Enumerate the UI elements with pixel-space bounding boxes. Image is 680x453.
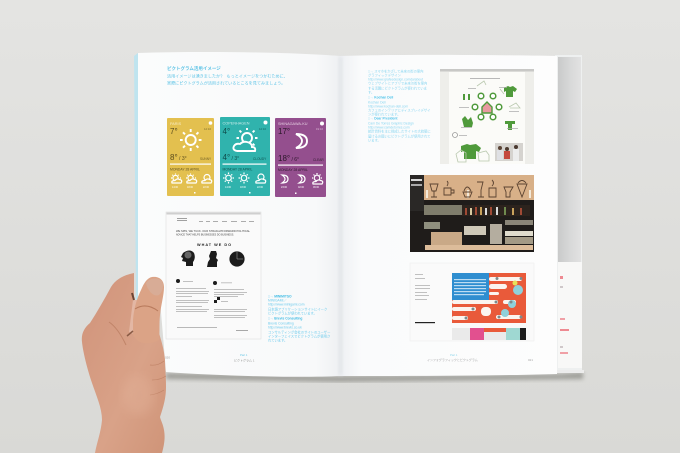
captions: right page: カフェのインテリアにディスプレイデザイ: [368, 108, 430, 112]
captions: right page: います。: [368, 138, 381, 142]
weather card: Copenhagen: 22:00: [257, 186, 264, 189]
weather card: Copenhagen: 4° / 3°: [222, 153, 239, 162]
screenshot: Brevis Consulting website: WE SPIN, WE TUCK. OUR STRAIGHTFORWARD POLITICAL: [176, 229, 250, 233]
page footer: right: [427, 353, 533, 362]
captions: left page: コンサルティング会社のサイトのユーザー: [268, 330, 330, 334]
weather card: Copenhagen: CLOUDY: [253, 157, 267, 161]
weather card: Paris: 7°: [170, 127, 178, 136]
page footer: left: Part 1: [240, 353, 248, 357]
weather card: Paris: PARIS: [170, 122, 182, 126]
weather card: Shinagawa-ku: 02:00: [298, 186, 305, 189]
hand holding the book: [82, 273, 166, 453]
photo: cafe interior with pictogram signage: [410, 175, 534, 252]
captions: left page: Brevis Consulting: [268, 322, 294, 326]
pictogram signage: [430, 180, 527, 197]
heading and intro text: ピクトグラム活用イメージ: [167, 65, 221, 72]
page footer: left: [165, 353, 255, 362]
book shadow: [166, 372, 583, 382]
what we do heading: WHAT WE DO: [197, 243, 232, 247]
page footer: left: 020: [165, 356, 170, 360]
captions: left page: http://www.minigami.com: [268, 302, 305, 306]
weather card: Copenhagen: COPENHAGEN: [222, 122, 250, 126]
captions: left page: インターフェイスでピクトグラムが使用さ: [268, 334, 330, 338]
captions: right page: □→ Dear President: [368, 116, 398, 120]
weather card: Paris: 12:10: [204, 127, 211, 131]
page footer: right: Part 1: [450, 353, 458, 357]
captions: right page: [368, 68, 431, 142]
weather card: Copenhagen: MONDAY 28 APRIL: [222, 168, 252, 172]
forecast icons: [171, 174, 212, 183]
captions: left page: れています。: [268, 338, 287, 342]
weather card: Shinagawa-ku: 23:00: [281, 186, 288, 189]
weather card: Shinagawa-ku: 06:00: [313, 186, 320, 189]
weather card: Copenhagen: 12:10: [259, 127, 266, 131]
weather card: Paris: MONDAY 28 APRIL: [170, 168, 200, 172]
captions: left page: ビクトグラムが使われています。: [268, 310, 317, 316]
heading and intro text: [167, 65, 288, 86]
counter: [431, 232, 462, 246]
forecast icons: [223, 172, 266, 184]
captions: left page: http://www.brevis.co.uk: [268, 326, 302, 330]
screenshot: green pictogram diagram: [440, 69, 534, 164]
weather card: Copenhagen: [220, 117, 270, 196]
captions: right page: Cam De Torres Graphic Design: [368, 122, 414, 126]
small copy lines: [176, 281, 248, 331]
weather card: Paris: [167, 118, 214, 196]
outlined pictogram figures: [456, 81, 520, 162]
captions: right page: す。: [368, 90, 374, 94]
weather card: Shinagawa-ku: 17°: [278, 127, 290, 136]
captions: right page: Kochan Deli: [368, 100, 386, 104]
captions: right page: ウェブサイトとアプリで未来の街を案内: [368, 80, 427, 86]
weather card: Shinagawa-ku: 18° / 6°: [278, 154, 299, 163]
weather card: Shinagawa-ku: [275, 118, 326, 197]
captions: right page: 統計資料を主に構成したサイトの大統領に: [368, 128, 431, 134]
weather card: Paris: 8° / 3°: [170, 153, 187, 162]
weather card: Shinagawa-ku: 19:10: [316, 127, 323, 131]
captions: right page: する活躍にピクトグラムが使われていま: [368, 86, 427, 90]
heading and intro text: 活用イメージは湧きましたか? もっとイメージをつかむために、: [167, 72, 288, 78]
captions: left page: MINIGAMI／: [268, 298, 287, 302]
screenshot: Brevis Consulting website: [166, 212, 261, 339]
shelves: [424, 205, 462, 215]
left page: [138, 52, 340, 377]
photo: three people: [495, 143, 523, 161]
weather card: Paris: 22:00: [203, 186, 210, 189]
page footer: right: インフォグラフィックとピクトグラム: [427, 357, 478, 362]
weather card: Paris: 18:00: [187, 186, 194, 189]
icon: sun behind cloud: [233, 128, 258, 151]
captions: left page: [268, 294, 330, 342]
weather card: Shinagawa-ku: SHINAGAWA-KU: [278, 122, 308, 126]
page footer: left: ピクトグラム 1: [234, 358, 255, 362]
weather card: Copenhagen: 4°: [222, 127, 230, 136]
captions: right page: 届けるお願いにピクトグラムが使用されて: [368, 134, 430, 138]
captions: right page: グラフィックデザイン: [368, 72, 402, 78]
right page: [340, 55, 557, 376]
plastic cover sleeve: [555, 55, 584, 373]
book spine edge: [134, 53, 139, 300]
icons: silhouettes and clock: [176, 250, 245, 303]
icon: central house: [482, 102, 492, 113]
weather card: Shinagawa-ku: CLEAR: [313, 158, 324, 162]
green pictogram figures: [461, 86, 517, 159]
icon: crescent moon: [296, 134, 307, 148]
captions: right page: http://www.grafeedesign.com/ja/about: [368, 78, 423, 82]
captions: left page: □→ MINIMITSO: [268, 294, 292, 298]
weather card: Paris: SUNNY: [200, 157, 212, 161]
forecast icons: [282, 173, 323, 184]
captions: right page: □→ Kochan Deli: [368, 96, 393, 100]
heading and intro text: 実際にピクトグラムが活用されているところを見てみましょう。: [167, 80, 285, 86]
captions: right page: http://www.kochan-deli.com: [368, 104, 408, 108]
captions: right page: http://www.camdetorres.com: [368, 126, 410, 130]
screenshot: Brevis Consulting website: ADVICE THAT HELPS BUSINESSES DO BUSINESS.: [176, 232, 234, 236]
weather card: Copenhagen: 14:00: [225, 186, 232, 189]
captions: left page: 日本語アプリケーションサイトにイーク: [268, 306, 327, 312]
weather card: Paris: 14:00: [172, 186, 179, 189]
captions: right page: □→ スマホをかざして未来の街の案内: [368, 68, 423, 74]
page footer: right: 021: [528, 358, 533, 362]
weather card: Shinagawa-ku: MONDAY 28 APRIL: [278, 168, 308, 172]
icon: sun: [180, 129, 202, 151]
screenshot: Dear President poster: [410, 263, 534, 341]
diagram ring: [472, 93, 502, 120]
captions: left page: □→ Brevis Consulting: [268, 316, 302, 320]
captions: right page: ンが使われています。: [368, 112, 400, 116]
weather card: Copenhagen: 18:00: [240, 186, 247, 189]
